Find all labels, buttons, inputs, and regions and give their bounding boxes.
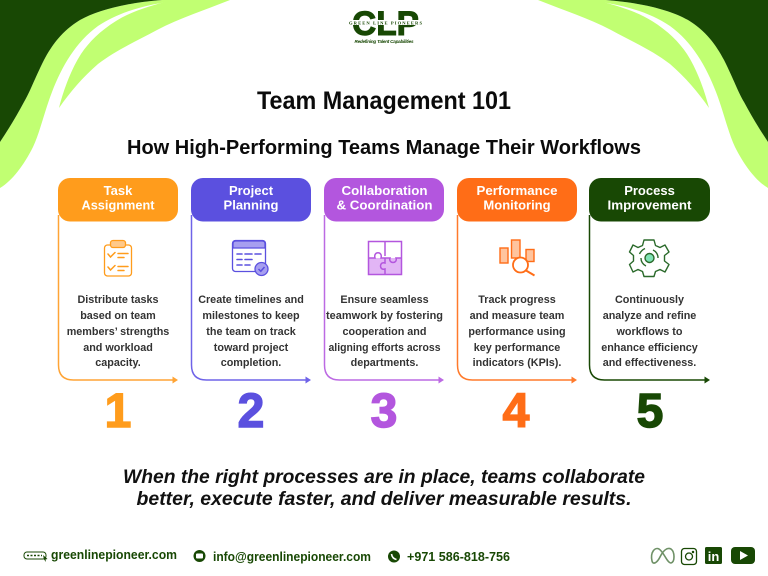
header: task assignment: Assignment	[82, 198, 155, 212]
description: project planning: the team on track	[206, 326, 297, 338]
header: project planning: Planning	[224, 198, 279, 212]
header: collaboration and coordination: & Coordination	[336, 198, 433, 212]
description: performance monitoring	[468, 294, 566, 369]
description: process improvement: enhance efficiency	[601, 342, 698, 354]
description: collaboration and coordination	[326, 294, 443, 369]
logo: CLP	[352, 5, 419, 43]
icon: phone	[388, 550, 400, 562]
description: performance monitoring: Track progress	[478, 294, 556, 306]
description: task assignment: based on team	[80, 310, 156, 322]
icon: instagram	[682, 548, 696, 564]
description: project planning	[198, 294, 304, 369]
header: process improvement	[589, 178, 710, 222]
icon: calendar with check	[232, 240, 268, 276]
footer: phone: +971 586-818-756	[407, 549, 510, 564]
description: collaboration and coordination: departments.	[351, 357, 418, 369]
description: process improvement: workflows to	[616, 326, 683, 338]
description: project planning: Create timelines and	[198, 294, 304, 306]
header: performance monitoring	[457, 178, 577, 222]
connector arrow: step 3	[324, 215, 444, 384]
header: process improvement: Process	[624, 183, 675, 198]
description: performance monitoring: key performance	[474, 342, 560, 354]
closing statement: When the right processes are in place, teams collaborate	[123, 467, 645, 488]
panel: process improvement	[589, 178, 710, 438]
header: collaboration and coordination	[324, 178, 444, 222]
description: project planning: completion.	[221, 357, 281, 369]
icon: clipboard checklist	[104, 240, 132, 276]
description: task assignment: capacity.	[95, 357, 141, 369]
header: project planning: Project	[229, 183, 274, 198]
decoration: top left corner swoosh	[0, 0, 230, 188]
icon: envelope	[194, 550, 206, 562]
icon: gear	[630, 240, 669, 276]
footer: website: greenlinepioneer.com	[51, 547, 177, 562]
description: task assignment: Distribute tasks	[77, 294, 159, 306]
description: task assignment: members’ strengths	[67, 326, 169, 338]
description: collaboration and coordination: teamwork by fostering	[326, 310, 443, 322]
title: Team Management 101	[257, 87, 511, 115]
description: performance monitoring: performance using	[468, 326, 566, 338]
description: project planning: milestones to keep	[202, 310, 300, 322]
icon: www cursor	[24, 552, 48, 562]
panel: collaboration and coordination	[324, 178, 444, 438]
decoration: top right corner swoosh	[538, 0, 768, 188]
description: process improvement	[601, 294, 698, 369]
panel: project planning	[191, 178, 311, 438]
description: task assignment: and workload	[83, 342, 153, 354]
number 5: 5	[637, 385, 663, 438]
header: task assignment: Task	[104, 183, 133, 198]
header: collaboration and coordination: Collaboration	[342, 183, 428, 198]
description: collaboration and coordination: aligning efforts across	[328, 342, 440, 354]
header: performance monitoring: Monitoring	[483, 198, 551, 212]
description: process improvement: Continuously	[615, 294, 684, 306]
description: project planning: toward project	[214, 342, 289, 354]
connector arrow: step 2	[192, 215, 311, 384]
footer: email: info@greenlinepioneer.com	[213, 549, 371, 564]
icon: linkedin: in	[708, 549, 719, 564]
description: task assignment	[67, 294, 169, 369]
social icons	[652, 547, 755, 564]
logo: Redefining Talent Capabilities	[354, 39, 414, 44]
description: process improvement: analyze and refine	[603, 310, 696, 322]
number 1: 1	[105, 385, 131, 438]
description: collaboration and coordination: Ensure seamless	[340, 294, 429, 306]
connector arrow: step 4	[458, 215, 577, 384]
connector arrow: step 1	[58, 215, 178, 384]
header: performance monitoring: Performance	[476, 183, 558, 198]
connector arrow: step 5	[590, 215, 710, 384]
logo: GREEN LINE PIONEERS	[349, 20, 422, 25]
description: performance monitoring: indicators (KPIs).	[473, 357, 561, 369]
icon: meta	[652, 548, 674, 563]
header: project planning	[191, 178, 311, 222]
description: collaboration and coordination: cooperation and	[343, 326, 426, 338]
header: process improvement: Improvement	[608, 198, 692, 212]
description: process improvement: and effectiveness.	[603, 357, 696, 369]
closing statement: better, execute faster, and deliver measurable results.	[136, 489, 632, 510]
icon: bar chart with magnifier	[500, 240, 534, 276]
icon: youtube	[731, 547, 755, 564]
icon: puzzle pieces	[368, 242, 402, 275]
number 2: 2	[238, 385, 264, 438]
panel: task assignment	[58, 178, 178, 438]
number 3: 3	[371, 385, 397, 438]
panel: performance monitoring	[457, 178, 577, 438]
header: task assignment	[58, 178, 178, 222]
closing statement	[123, 467, 645, 510]
description: performance monitoring: and measure team	[470, 310, 564, 322]
subtitle: How High-Performing Teams Manage Their Workflows	[127, 137, 641, 159]
number 4: 4	[503, 385, 530, 438]
